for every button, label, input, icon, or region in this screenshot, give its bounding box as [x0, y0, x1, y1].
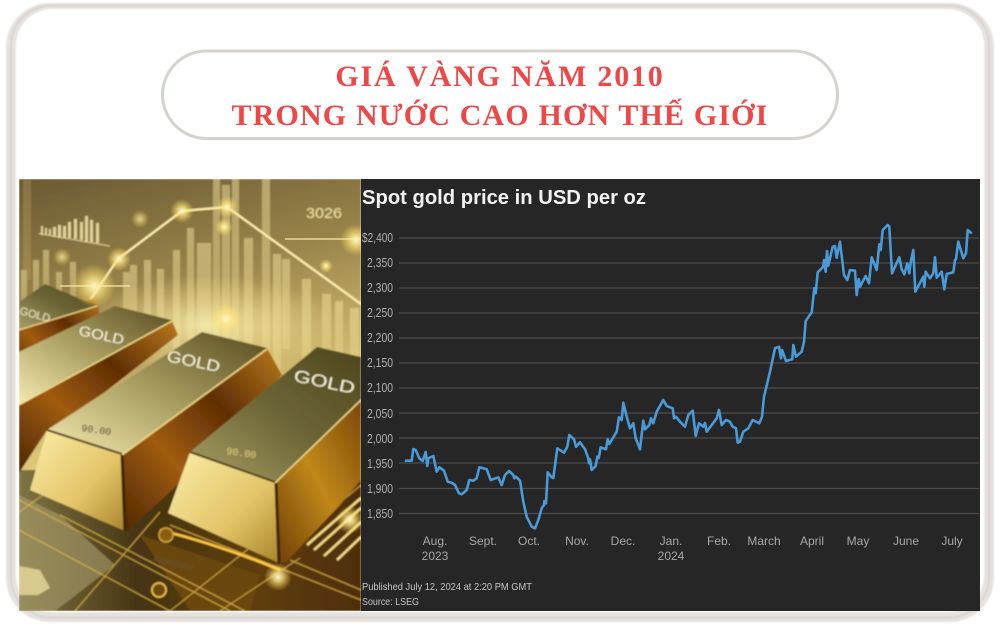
photo: gold bars — [18, 179, 372, 611]
bar 3 — [30, 332, 282, 531]
x axis labels: April — [800, 534, 824, 548]
price line — [406, 225, 971, 528]
gridlines and y axis: 2,250 — [367, 306, 393, 320]
x axis labels: Nov. — [565, 534, 589, 548]
title pill — [162, 51, 838, 138]
title line two: TRONG NƯỚC CAO HƠN THẾ GIỚI — [232, 98, 768, 132]
gridlines and y axis: 1,950 — [367, 457, 393, 471]
gridlines and y axis: 2,150 — [367, 356, 393, 370]
bar 3: 90.00 — [80, 424, 112, 439]
glow highlights — [53, 196, 372, 591]
x axis labels: Oct. — [518, 534, 540, 548]
bar 3: GOLD — [165, 348, 222, 376]
title line one: GIÁ VÀNG NĂM 2010 — [335, 60, 665, 93]
bar 4: 90.00 — [225, 447, 257, 462]
x axis labels: Dec. — [611, 534, 635, 548]
gridlines and y axis: 2,350 — [367, 256, 393, 270]
publication note and source: Published July 12, 2024 at 2:20 PM GMT — [362, 581, 533, 593]
floor with grid — [19, 470, 361, 611]
gridlines and y axis: 2,100 — [367, 381, 393, 395]
x axis labels: Jan. — [660, 534, 682, 548]
x axis labels: Feb. — [707, 534, 731, 548]
gridlines and y axis: 1,900 — [367, 482, 393, 496]
chart lines at right corner — [307, 498, 361, 560]
x axis labels: July — [941, 534, 963, 548]
bar 1 — [19, 284, 100, 352]
3026 label: 3026 — [306, 205, 342, 222]
background glowing bar chart — [21, 179, 359, 389]
x axis labels: June — [893, 534, 919, 548]
gridlines and y axis: 1,850 — [367, 507, 393, 521]
x axis labels: Sept. — [469, 534, 497, 548]
bar 4 — [168, 347, 361, 563]
x axis labels: 2023 — [422, 549, 449, 563]
x axis labels — [422, 534, 963, 563]
gridlines and y axis: $2,400 — [362, 231, 393, 245]
bar 4: GOLD — [292, 366, 357, 398]
x axis labels: Aug. — [423, 534, 447, 548]
publication note and source: Source: LSEG — [362, 596, 419, 608]
bar 2: GOLD — [77, 322, 126, 347]
bar 2 — [19, 306, 178, 473]
trend line — [90, 207, 361, 304]
x axis labels: March — [747, 534, 781, 548]
x axis labels: May — [847, 534, 869, 548]
gridlines and y axis — [362, 231, 979, 521]
gridlines and y axis: 2,200 — [367, 331, 393, 345]
panel: spot gold price chart — [361, 179, 980, 611]
x axis labels: 2024 — [658, 549, 685, 563]
small chart sketch — [39, 216, 110, 246]
gridlines and y axis: 2,300 — [367, 281, 393, 295]
bar 1: GOLD — [18, 305, 51, 325]
chart title: Spot gold price in USD per oz — [362, 187, 646, 209]
gridlines and y axis: 2,000 — [367, 432, 393, 446]
gridlines and y axis: 2,050 — [367, 407, 393, 421]
publication note and source — [362, 581, 533, 608]
